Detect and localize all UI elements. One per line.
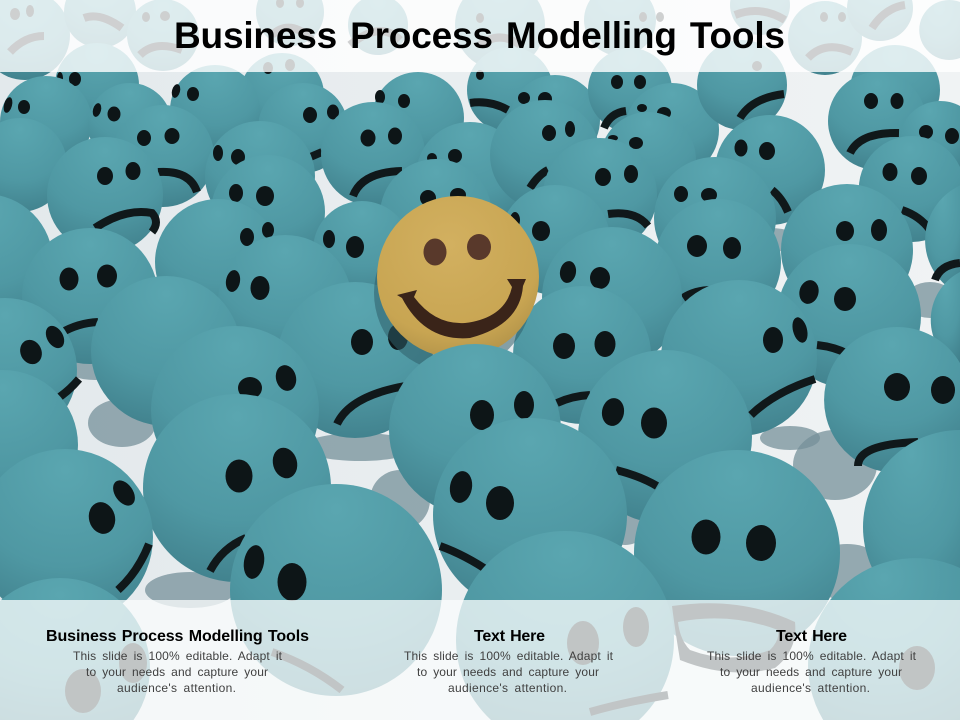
icon: ball 1	[55, 43, 139, 127]
icon: ball top row 12	[919, 0, 960, 60]
text block: column 1	[46, 628, 309, 695]
icon: ball 2	[0, 76, 92, 168]
icon: ball 56	[230, 484, 442, 696]
icon: ball top row 2	[64, 0, 136, 48]
text block: column 3: This slide is 100% editable. Adapt it	[707, 649, 917, 663]
icon: ball 47	[0, 370, 78, 520]
icon: ball 33	[313, 201, 411, 299]
icon: ball 52	[0, 449, 153, 625]
icon: ball 40	[931, 272, 960, 368]
icon: ball 31	[925, 186, 960, 294]
text block: column 2	[404, 628, 614, 695]
icon: ball 14	[588, 48, 672, 132]
icon: ball 4	[88, 83, 172, 167]
icon: ball 37	[218, 235, 352, 369]
icon: ball 19	[697, 40, 787, 130]
text block: column 2: to your needs and capture your	[417, 665, 599, 679]
icon: ball top row 6	[348, 0, 408, 55]
icon: ball 29	[500, 185, 610, 295]
icon: ball top row 3	[127, 0, 199, 71]
icon: ball 27	[380, 159, 492, 271]
icon: ball top row 9	[730, 0, 790, 35]
icon: ball top row 11	[847, 0, 913, 41]
icon: ball top row 5	[240, 53, 324, 137]
icon: ball 49	[389, 344, 561, 516]
text block: column 1: audience's attention.	[117, 681, 236, 695]
icon: ball 34	[655, 199, 781, 325]
icon: ball 15	[625, 83, 719, 177]
icon: ball 22	[828, 72, 926, 170]
title band	[0, 0, 960, 72]
text block: column 1: This slide is 100% editable. Adapt it	[73, 649, 283, 663]
icon: ball 18	[600, 112, 696, 208]
icon: ball 11	[321, 102, 425, 206]
icon: ball 59	[808, 558, 960, 720]
text block: column 1: Business Process Modelling Tools	[46, 628, 309, 645]
text block: column 3	[707, 628, 917, 695]
icon: ball 12	[467, 47, 553, 133]
icon: ball 54	[433, 418, 627, 612]
icon: ball top row 7	[455, 0, 545, 70]
icon: ball 25	[543, 138, 657, 252]
icon: ball 30	[781, 184, 913, 316]
icon: ball top row 1	[0, 0, 70, 80]
icon: ball 32	[155, 199, 281, 325]
icon: ball 5	[112, 105, 214, 207]
shadow cast by yellow ball	[374, 214, 532, 372]
floor shadows	[65, 228, 955, 608]
icon: ball 24	[859, 136, 960, 242]
caption band	[0, 600, 960, 720]
icon: ball top row 10	[788, 1, 862, 75]
icon: ball 53	[863, 430, 960, 624]
icon: ball 23	[899, 101, 960, 183]
icon: ball 6	[0, 118, 67, 212]
icon: ball 57	[0, 578, 150, 720]
icon: ball 26	[654, 157, 776, 279]
icon: ball 9	[205, 121, 315, 231]
icon: ball 10	[47, 137, 163, 253]
icon: ball 28	[211, 155, 325, 269]
icon: ball 51	[143, 394, 331, 582]
icon: ball 42	[277, 282, 433, 438]
icon: ball 48	[824, 327, 960, 473]
icon: ball 58	[456, 531, 674, 720]
icon: ball 36	[22, 228, 158, 364]
icon: ball 39	[777, 244, 921, 388]
icon: ball 13	[510, 75, 600, 165]
icon: ball 44	[661, 280, 817, 436]
icon: ball 38	[542, 227, 682, 367]
icon: ball 8	[372, 72, 464, 164]
icon: happy yellow smiley ball	[377, 196, 539, 358]
text block: column 3: to your needs and capture your	[720, 665, 902, 679]
icon: ball 41	[91, 276, 241, 426]
text block: column 1: to your needs and capture your	[86, 665, 268, 679]
icon: ball 45	[0, 298, 79, 442]
text block: column 2: This slide is 100% editable. Adapt it	[404, 649, 614, 663]
icon: ball 50	[578, 350, 752, 524]
text block: column 3: audience's attention.	[751, 681, 870, 695]
icon: ball 55	[634, 450, 840, 672]
icon: ball 17	[490, 100, 600, 210]
icon: ball 16	[416, 122, 524, 230]
icon: ball 43	[513, 286, 651, 424]
text block: column 2: audience's attention.	[448, 681, 567, 695]
icon: ball 7	[258, 83, 348, 173]
icon: ball 35	[0, 194, 53, 330]
text block: column 2: Text Here	[474, 628, 545, 645]
title: Business Process Modelling Tools	[174, 15, 785, 56]
icon: ball 3	[170, 65, 260, 155]
icon: ball top row 8	[584, 0, 664, 56]
icon: ball 46	[151, 326, 319, 494]
icon: ball top row 4	[256, 0, 324, 46]
icon: ball 20	[715, 115, 825, 225]
text block: column 3: Text Here	[776, 628, 847, 645]
icon: ball 21	[850, 45, 940, 135]
